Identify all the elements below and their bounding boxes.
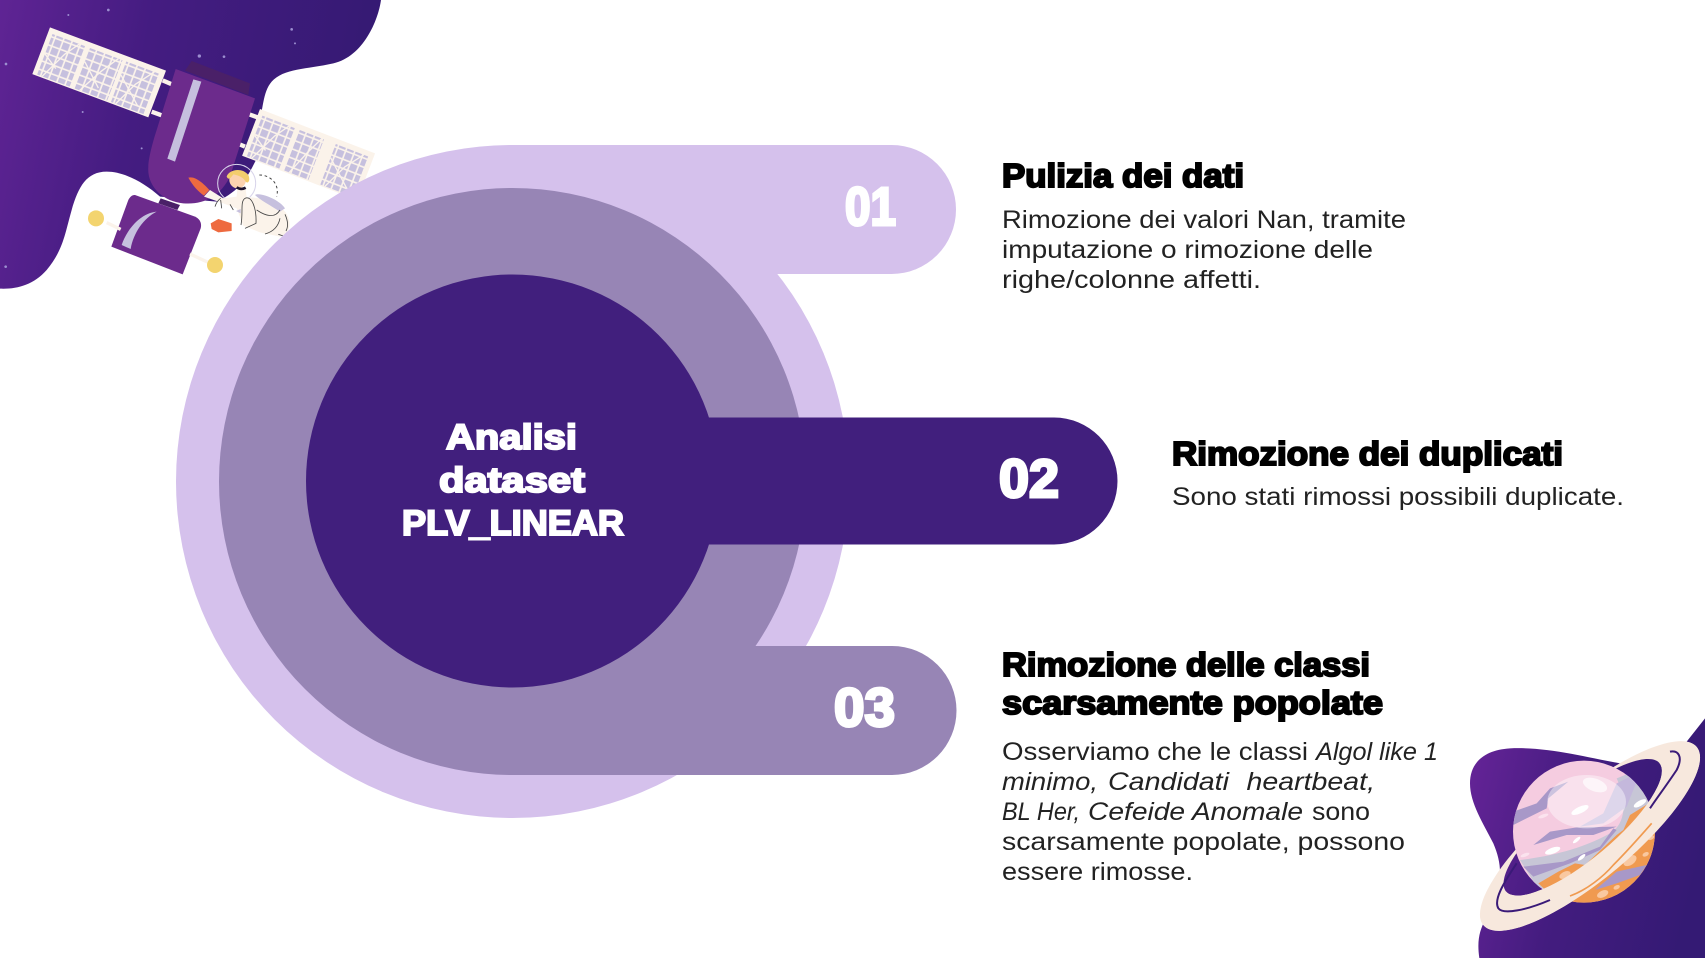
block highlight (122, 212, 157, 249)
heading 03 (1002, 646, 1383, 721)
astronaut (188, 164, 290, 237)
ring: back (1456, 714, 1705, 958)
body 03: BL Her, (1002, 798, 1080, 826)
satellite neck (158, 198, 180, 210)
light beams (107, 223, 207, 262)
planet illustration (1456, 714, 1705, 958)
text block 01 (1002, 157, 1406, 294)
heading 03: scarsamente popolate (1002, 684, 1383, 721)
body 03: scarsamente popolate, possono (1002, 828, 1405, 856)
heading 01: Pulizia dei dati (1002, 157, 1244, 194)
background blob: top left (0, 0, 381, 289)
ring: front (1480, 742, 1700, 931)
satellite cap (185, 61, 250, 95)
outer circle with tab 01 (176, 145, 956, 818)
body 03 (1002, 738, 1438, 886)
number 01: 01 (845, 177, 896, 237)
satellite lower block (111, 195, 201, 274)
heading 03: Rimozione delle classi (1002, 646, 1370, 683)
panel connectors (152, 80, 257, 147)
number 03: 03 (834, 678, 895, 738)
inner circle with tab 02 (306, 274, 1118, 688)
body 01 (1002, 206, 1406, 294)
body 03: minimo, (1002, 768, 1098, 796)
diagram: concentric circles with tabs (176, 145, 1118, 818)
center label: Analisi (446, 418, 577, 457)
body 03: Algol like 1 (1314, 738, 1438, 766)
yellow dots (88, 210, 223, 273)
solar panel: right (242, 109, 375, 200)
body stripe (167, 79, 201, 162)
body 03: Osserviamo che le classi (1002, 738, 1308, 766)
text block 02 (1172, 435, 1624, 511)
center label (402, 418, 624, 543)
body 01: imputazione o rimozione delle (1002, 236, 1373, 264)
body 01: righe/colonne affetti. (1002, 266, 1261, 294)
number 02: 02 (999, 449, 1059, 509)
body 01: Rimozione dei valori Nan, tramite (1002, 206, 1406, 234)
middle circle with tab 03 (219, 188, 956, 775)
body 02: Sono stati rimossi possibili duplicate. (1172, 483, 1624, 511)
body 03: sono (1312, 798, 1370, 826)
background blob: bottom right (1470, 718, 1705, 958)
planet sphere (1513, 760, 1655, 903)
body 03: Cefeide Anomale (1088, 798, 1303, 826)
body 03: Candidati (1108, 768, 1231, 796)
text block 03 (1002, 646, 1438, 886)
solar panel: left (32, 27, 166, 117)
center label: dataset (439, 461, 585, 500)
heading 02: Rimozione dei duplicati (1172, 435, 1563, 472)
body 03: heartbeat, (1246, 768, 1375, 796)
ring gap lines (1497, 751, 1680, 911)
center label: PLV_LINEAR (402, 504, 624, 543)
satellite body (148, 69, 255, 204)
illustration: satellite and astronaut (0, 0, 381, 289)
body 03: essere rimosse. (1002, 858, 1193, 886)
stars (4, 9, 296, 268)
